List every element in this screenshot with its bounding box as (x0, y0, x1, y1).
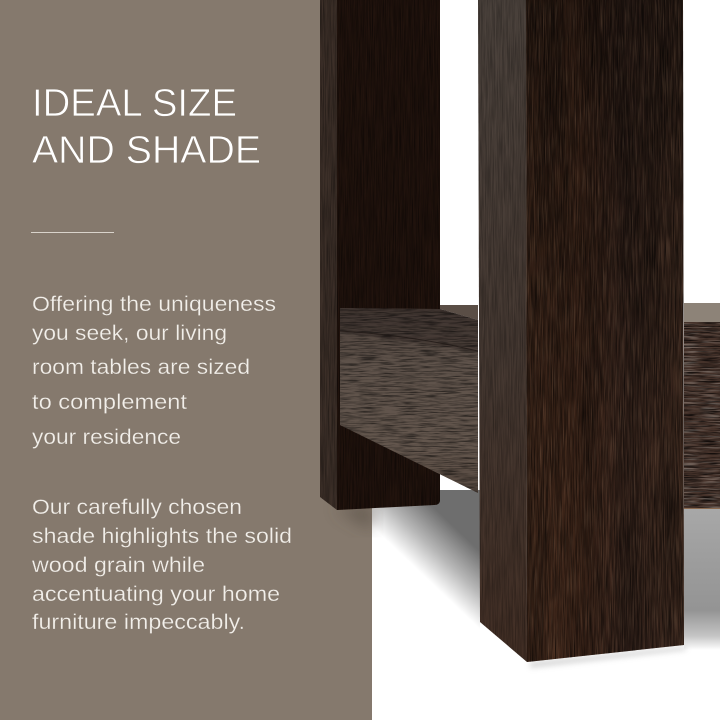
front leg front face (526, 0, 684, 662)
text block: shade paragraph: furniture impeccably. (32, 611, 245, 634)
text block: uniqueness paragraph: to complement (32, 391, 187, 414)
table: front leg (478, 0, 684, 662)
title: IDEAL SIZE (32, 82, 237, 125)
title (32, 82, 261, 172)
title: AND SHADE (32, 129, 261, 172)
back leg front face (337, 0, 440, 510)
shadow of back leg on panel (335, 505, 372, 530)
back leg side face (320, 0, 337, 510)
front leg side face (478, 0, 527, 662)
text block: shade paragraph: wood grain while (31, 554, 205, 577)
text block: shade paragraph: accentuating your home (32, 583, 280, 606)
text block: shade paragraph: shade highlights the solid (32, 525, 292, 548)
text block: shade paragraph (31, 496, 292, 634)
table: shelf top surface (440, 305, 478, 320)
right shelf front (684, 322, 720, 509)
text block: uniqueness paragraph: room tables are sized (32, 356, 250, 379)
panel: text background (0, 0, 372, 720)
text block: uniqueness paragraph: your residence (32, 426, 181, 449)
divider rule (31, 232, 114, 233)
text block: uniqueness paragraph: Offering the uniqueness (32, 293, 276, 316)
floor shadow under shelf (372, 490, 720, 668)
right shelf top surface (684, 303, 720, 322)
text block: uniqueness paragraph: you seek, our living (32, 322, 227, 345)
table: right shelf (684, 303, 720, 509)
text block: uniqueness paragraph (32, 293, 276, 449)
table: shelf front (340, 308, 478, 493)
text block: shade paragraph: Our carefully chosen (32, 496, 242, 519)
table: back leg (320, 0, 440, 510)
